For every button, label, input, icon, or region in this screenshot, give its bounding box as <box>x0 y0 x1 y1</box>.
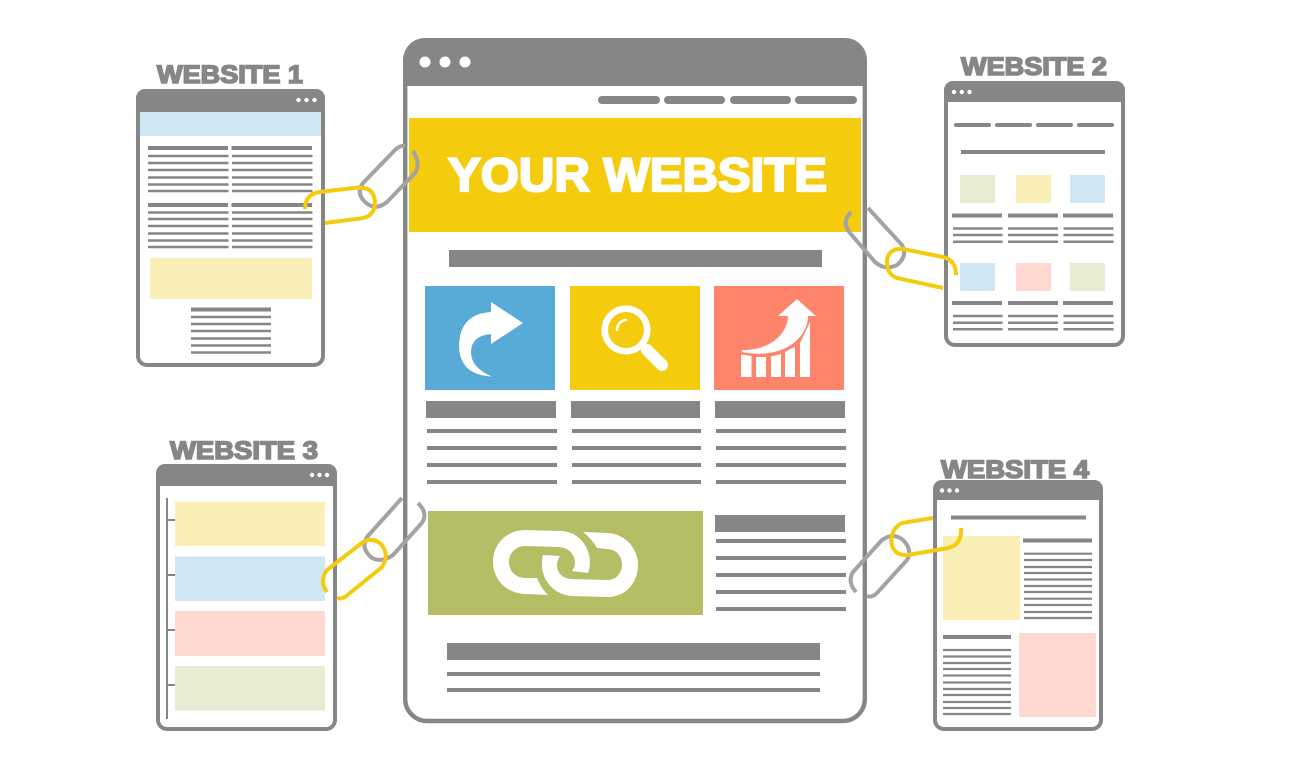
website 4 header <box>933 480 1103 500</box>
browser header bar <box>403 38 867 86</box>
website 1 header <box>136 89 325 112</box>
website 2 window <box>946 83 1123 345</box>
column text blocks <box>426 410 846 482</box>
website 1 window <box>138 91 323 365</box>
link: website 1 paperclips <box>305 146 418 223</box>
panel: your website <box>403 38 867 721</box>
website 2 navigation <box>956 123 1112 127</box>
website 2 top squares <box>960 175 1105 203</box>
website 3 timeline <box>167 498 176 719</box>
website 2 heading bar <box>961 150 1105 154</box>
website 2 header <box>944 81 1125 102</box>
website 2 heading: WEBSITE 2 <box>961 53 1107 81</box>
website 1 lower text <box>191 310 271 352</box>
website 2 bottom squares <box>960 263 1105 291</box>
heading bar <box>449 250 822 267</box>
website 4 left text <box>943 637 1011 714</box>
website 1 blue band <box>140 112 321 136</box>
footer text block <box>447 643 820 690</box>
website 4 pink block <box>1019 633 1096 717</box>
website 3 window <box>158 466 335 729</box>
website 2 top text <box>952 216 1114 242</box>
card: magnifier icon <box>570 286 700 390</box>
card: growth chart icon <box>714 286 844 390</box>
website 4 yellow block <box>943 536 1020 620</box>
website 1 yellow block <box>150 258 312 299</box>
link: website 3 paperclips <box>323 498 425 598</box>
card: arrow icon <box>425 286 555 390</box>
website 4 window <box>935 482 1101 729</box>
panel: website 3 <box>156 437 337 729</box>
website 1 text columns <box>148 148 312 247</box>
website 4 heading: WEBSITE 4 <box>941 456 1089 484</box>
link: website 2 paperclips <box>846 208 956 288</box>
panel: website 1 <box>136 61 325 365</box>
website 1 heading: WEBSITE 1 <box>157 61 303 89</box>
navigation pills <box>602 96 853 104</box>
website 4 right text <box>1023 540 1092 618</box>
banner <box>409 118 861 232</box>
banner: YOUR WEBSITE <box>448 148 827 201</box>
card: chain link icon <box>428 511 703 615</box>
website 3 header <box>156 464 337 486</box>
website 3 heading: WEBSITE 3 <box>170 437 318 465</box>
side text block <box>715 515 846 609</box>
website 3 colour rows <box>175 502 325 710</box>
website 4 heading bar <box>951 516 1086 520</box>
link: website 4 paperclips <box>851 518 961 597</box>
panel: website 2 <box>944 53 1125 345</box>
website 2 bottom text <box>952 303 1114 329</box>
panel: website 4 <box>933 456 1103 729</box>
